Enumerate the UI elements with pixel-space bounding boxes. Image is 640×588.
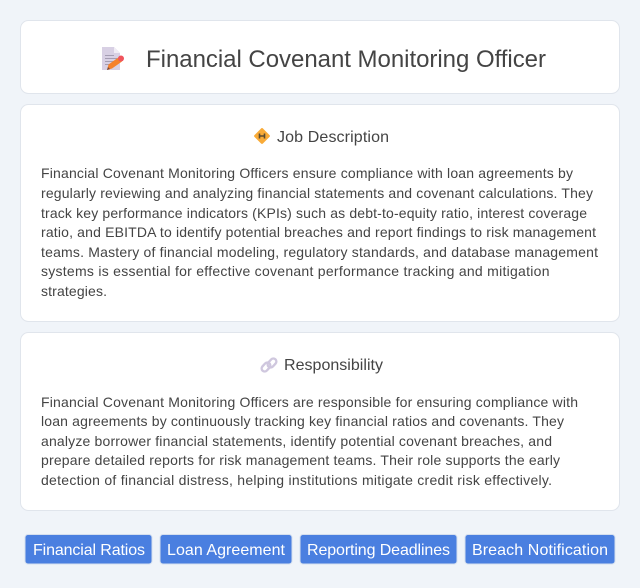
- tag: reporting deadlines: Reporting Deadlines: [307, 542, 450, 559]
- text block: job description: Financial Covenant Monitoring Officers ensure compliance with loan agreements by: [41, 165, 573, 181]
- icon: document with pencil: [102, 47, 124, 70]
- text block: job description: teams. Mastery of financial modeling, regulatory standards, and database management: [41, 244, 598, 260]
- panel: responsibility: [20, 332, 620, 510]
- panel: job description: [20, 104, 620, 322]
- tag: breach notification: [465, 534, 615, 564]
- text block: responsibility: [41, 394, 578, 488]
- panel: title: [20, 20, 620, 94]
- text block: responsibility: loan agreements by continuously tracking key financial ratios and covenants. They: [41, 413, 564, 429]
- text block: responsibility: Financial Covenant Monitoring Officers are responsible for ensuring compliance with: [41, 394, 578, 410]
- text block: responsibility: detection of financial distress, helping institutions mitigate credit risk effectively.: [41, 472, 552, 488]
- tag: financial ratios: [25, 534, 152, 564]
- heading: responsibility: Responsibility: [284, 357, 383, 374]
- text block: job description: regularly reviewing and analyzing financial statements and covenant calculations. They: [41, 185, 593, 201]
- tag: breach notification: Breach Notification: [472, 542, 608, 559]
- icon: chain link: [260, 357, 278, 373]
- text block: job description: track key performance indicators (KPIs) such as debt-to-equity ratio, interest coverage: [41, 205, 587, 221]
- text block: job description: strategies.: [41, 283, 107, 299]
- title text: Financial Covenant Monitoring Officer: [146, 46, 546, 73]
- tag: reporting deadlines: [300, 534, 457, 564]
- text block: responsibility: analyze borrower financial statements, identify potential covenant breaches, and: [41, 433, 552, 449]
- icon: diamond sign: [254, 128, 270, 144]
- tag: loan agreement: [160, 534, 292, 564]
- text block: job description: systems is essential for effective covenant performance tracking and mitigation: [41, 263, 550, 279]
- text block: job description: ratio, and EBITDA to identify potential breaches and report findings to risk management: [41, 224, 596, 240]
- tag: financial ratios: Financial Ratios: [33, 542, 145, 559]
- heading: job description: Job Description: [277, 129, 389, 146]
- text block: responsibility: prepare detailed reports for risk management teams. Their role supports the early: [41, 452, 560, 468]
- text block: job description: [41, 165, 598, 299]
- tag: loan agreement: Loan Agreement: [167, 542, 286, 559]
